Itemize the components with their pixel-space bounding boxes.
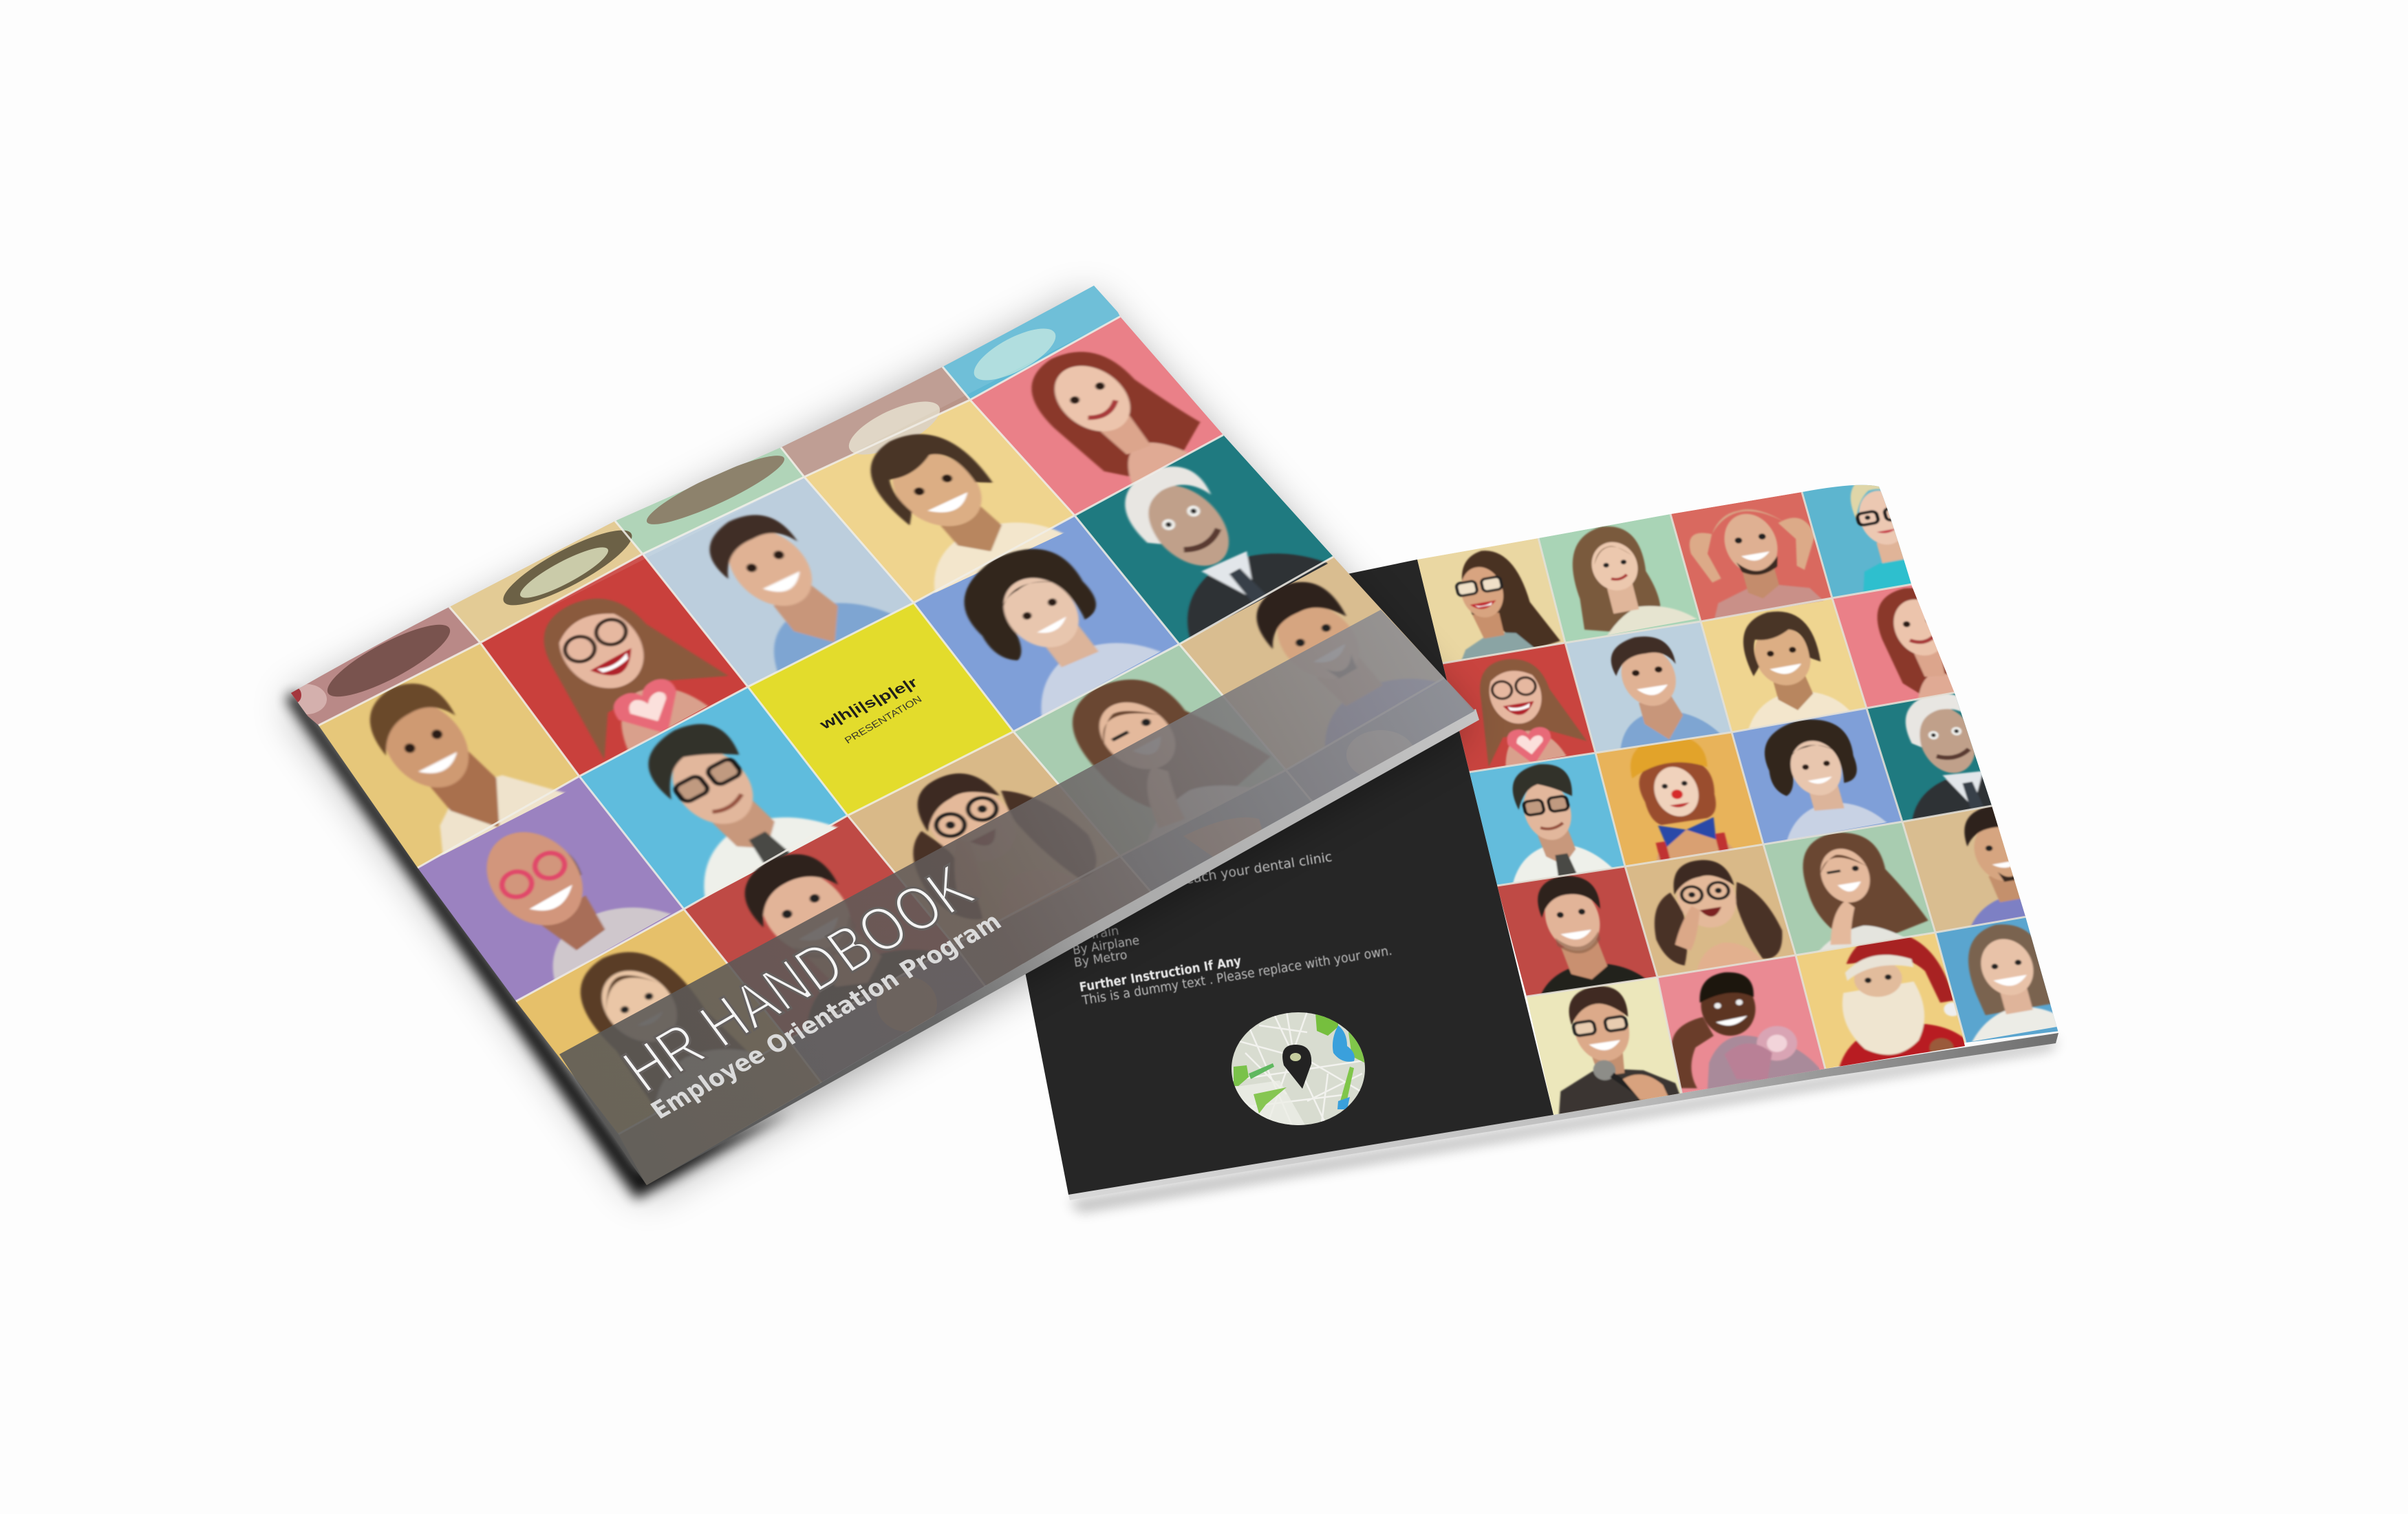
text: by airplane: By Airplane bbox=[1072, 933, 1141, 958]
icon: round map with location pin bbox=[1232, 1012, 1369, 1129]
spine sheen bbox=[275, 279, 1120, 725]
dark directions panel bbox=[963, 559, 1554, 1195]
portrait: woman with fringe bbox=[546, 921, 779, 1129]
portrait: clown bbox=[1623, 730, 1741, 871]
text: by metro: By Metro bbox=[1073, 948, 1128, 970]
ground shadow under the open brochure bbox=[1068, 1039, 2058, 1213]
portrait: man with black glasses bbox=[1481, 756, 1620, 893]
logo wordmark: w|h|i|s|p|e|r bbox=[816, 675, 921, 733]
tile grid background colours bbox=[1417, 468, 2105, 1115]
tile backgrounds bbox=[275, 279, 1514, 1211]
portrait: smiling man on red bbox=[1506, 867, 1655, 1004]
cover page thickness bbox=[647, 709, 1479, 1185]
portrait: santa bbox=[1803, 924, 1978, 1076]
portrait: old man bbox=[1079, 427, 1344, 651]
portrait: curly-haired woman bbox=[936, 520, 1175, 729]
portrait: man with headphones bbox=[1658, 960, 1829, 1105]
page thickness edge bbox=[1068, 1033, 2058, 1200]
portrait: man in blue tee bbox=[1212, 552, 1456, 762]
portrait: red-haired woman bbox=[1011, 325, 1223, 503]
portrait: man with fringe bbox=[822, 408, 1077, 606]
top row of foreshortened portraits along the spine bbox=[286, 319, 1063, 714]
portrait: winking woman bbox=[1776, 822, 1935, 962]
portrait: girl with pigtails bbox=[1636, 851, 1792, 985]
portrait grid bbox=[1417, 484, 2058, 1115]
portrait: red-haired woman bbox=[1868, 579, 1996, 711]
panel: front cover of brochure bbox=[275, 279, 1514, 1211]
portrait: woman with glasses bbox=[1454, 549, 1561, 659]
icon: location pin bbox=[1282, 1045, 1311, 1089]
portrait: smiling man on yellow bbox=[337, 644, 584, 870]
logo subtitle: PRESENTATION bbox=[842, 694, 924, 745]
portrait: bald man with pink glasses bbox=[462, 789, 686, 992]
text: further instruction heading: Further Instruction If Any bbox=[1078, 954, 1243, 995]
portrait: laughing woman bbox=[1935, 915, 2081, 1052]
subtitle: Employee Orientation Program: Employee Orientation Program bbox=[646, 908, 1007, 1124]
portrait: smiling man on red bbox=[695, 818, 957, 1044]
text: further instruction body: This is a dummy text . Please replace with your own. bbox=[1081, 943, 1393, 1008]
portrait: man in blue shirt bbox=[674, 487, 911, 685]
portrait: man in blue tee bbox=[1932, 796, 2085, 936]
text: by train (partly hidden): By Train bbox=[1069, 924, 1120, 946]
panel: back page of brochure bbox=[1024, 484, 2058, 1200]
portrait: man in blue shirt bbox=[1610, 635, 1720, 749]
title band overlay bbox=[559, 610, 1486, 1197]
portrait: woman with long hair bbox=[1571, 526, 1697, 635]
portrait: blonde woman with glasses bbox=[1849, 484, 1911, 592]
portrait: old man bbox=[1872, 680, 2050, 830]
portrait: girl with lollipop bbox=[513, 564, 746, 772]
portrait: man with microphone bbox=[1529, 978, 1684, 1124]
logo tile bbox=[748, 603, 1013, 815]
cover drop shadow bbox=[286, 297, 1472, 1199]
portrait: man with black glasses bbox=[597, 694, 853, 911]
portrait: winking woman bbox=[1029, 646, 1291, 858]
title: HR HANDBOOK: HR HANDBOOK bbox=[610, 851, 986, 1105]
portrait: girl with lollipop bbox=[1479, 658, 1587, 767]
portrait: man with hands on head bbox=[1688, 509, 1825, 619]
cover artwork bbox=[275, 279, 1514, 1211]
portrait: curly-haired woman bbox=[1750, 710, 1895, 850]
portrait: man with fringe bbox=[1742, 610, 1849, 729]
portrait: girl with pigtails bbox=[864, 741, 1121, 950]
text: directions heading (partly hidden): Ways to reach your dental clinic bbox=[1124, 849, 1333, 897]
